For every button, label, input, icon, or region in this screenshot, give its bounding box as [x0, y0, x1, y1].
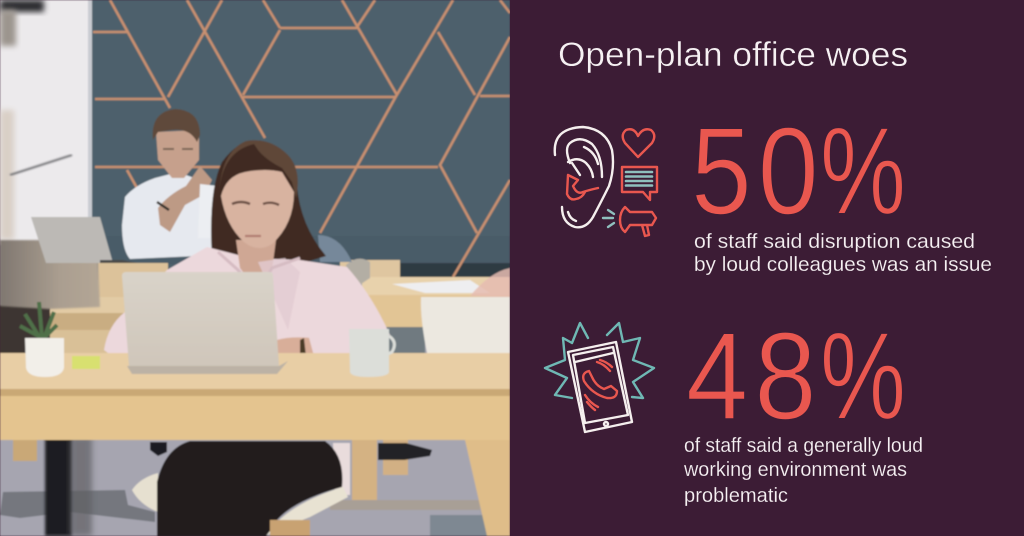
- stat: 50%: %: [820, 101, 906, 241]
- foreground desk: [0, 353, 510, 536]
- wall with copper geometric lines: [90, 0, 510, 280]
- text: 50% description: by loud colleagues was an issue: [694, 254, 992, 276]
- coffee mug: [349, 329, 394, 377]
- icon: ear with heart, speech bubble and megaphone: [555, 127, 657, 236]
- stat: 48%: %: [820, 306, 906, 446]
- front laptop: [122, 272, 288, 374]
- sticky notes: [72, 356, 100, 369]
- stat: 50%: [691, 101, 906, 241]
- blurred passer-by streak: [10, 155, 72, 175]
- icon: ringing phone with burst: [545, 323, 654, 432]
- text: 50% description: [694, 231, 992, 276]
- panel: office photo: [0, 0, 510, 536]
- woman in pink shirt: [104, 140, 390, 362]
- plant in white pot: [20, 302, 64, 377]
- blurred grey foreground panel: [0, 240, 100, 309]
- back desks: [0, 260, 510, 357]
- stat: 48%: [686, 306, 906, 446]
- stat: 48%: 48: [686, 307, 816, 445]
- lower scene: floor, legs, chair: [0, 436, 487, 536]
- white column at left: [0, 0, 92, 245]
- text: 48% description: of staff said a generally loud: [684, 435, 923, 457]
- back laptop: [31, 217, 137, 263]
- small grey plant pot: [346, 259, 370, 286]
- white chair right: [421, 297, 510, 358]
- text: 48% description: [683, 435, 923, 507]
- text: 50% description: of staff said disruption caused: [694, 231, 975, 253]
- stat: 50%: 50: [691, 101, 819, 241]
- man in white shirt: [122, 109, 220, 259]
- chair behind woman: [318, 235, 352, 262]
- text: 48% description: problematic: [684, 485, 788, 507]
- panel: statistics: [510, 0, 1024, 536]
- text: 48% description: working environment was: [683, 459, 907, 481]
- title: Open-plan office woes: [558, 36, 908, 74]
